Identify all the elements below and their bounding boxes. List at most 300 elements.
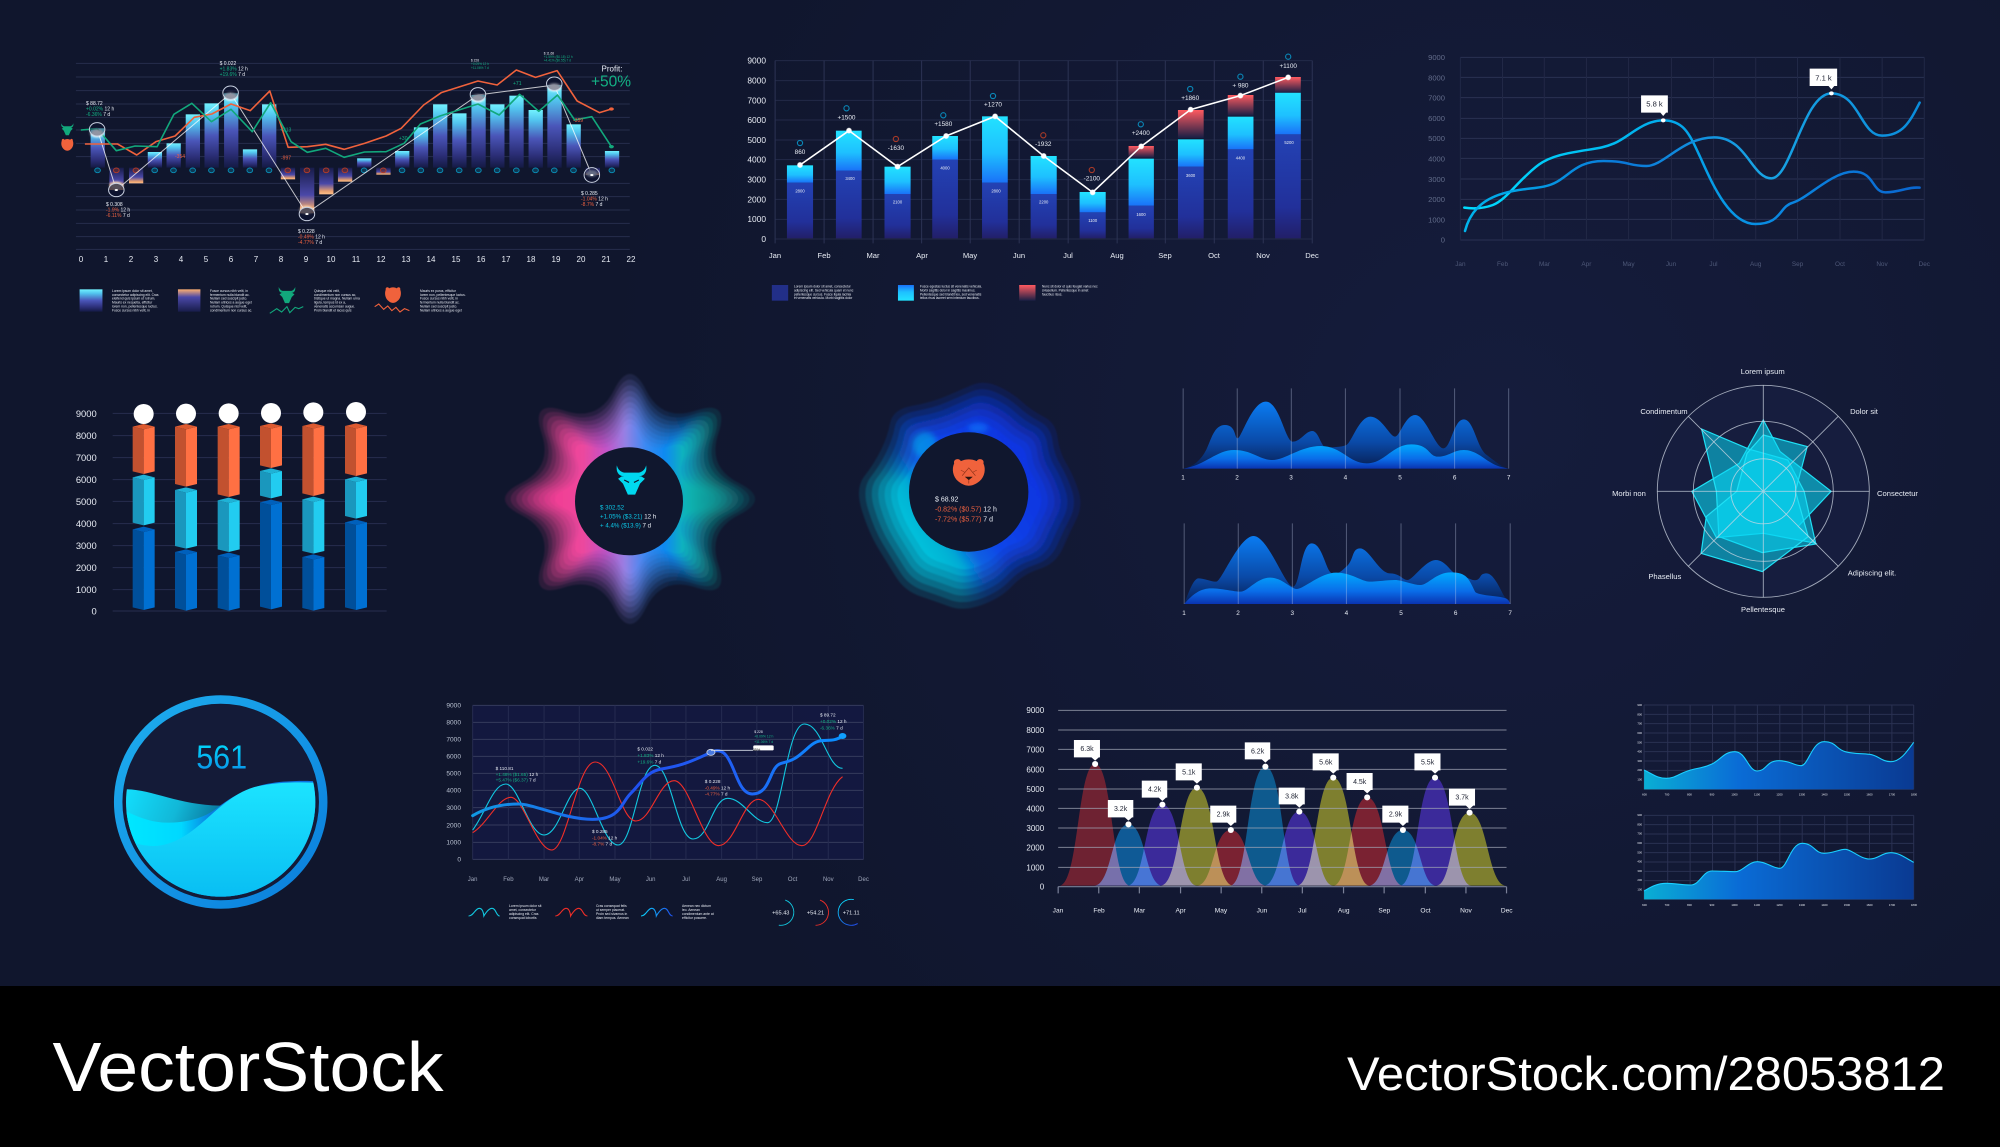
month labels: Jun [646,877,656,883]
change labels: -354 [175,154,185,160]
ratio dial 1 [764,896,797,929]
y axis labels: 3000 [747,174,766,184]
legend text 2: Pellentesque sed blandit leo, sed venenatis [920,292,982,296]
month labels: Feb [1093,908,1105,914]
legend text 3: leo. Aenean [682,908,700,912]
tooltip labels: 6.2k [1251,748,1265,755]
tooltip boxes [1074,740,1475,826]
cyan line [473,724,843,845]
ridge chart shapes [1183,388,1511,604]
chart annotations: -6.36% [820,725,835,730]
small price annotations: +0.09% 12 h [471,62,489,66]
bull price line [81,94,611,157]
price annotations: 7 d [314,240,322,246]
y axis labels: 4000 [446,788,461,795]
price annotations: $ 0.022 [220,61,237,67]
change labels: +71 [513,81,522,87]
y axis labels: 3000 [1428,175,1445,184]
top area [1644,742,1914,789]
month labels: Jul [1063,251,1073,260]
change labels: -997 [281,156,291,162]
legend text 2: Morbi sagittis dolor in sagittis maximus. [920,288,976,292]
legend text 1: Lorem ipsum dolor sit [509,904,541,908]
top front area [1183,444,1509,469]
bottom chart y labels: 200 [1637,878,1642,882]
price annotations: -6.36% [86,112,102,118]
tooltip labels: 2.9k [1217,812,1230,819]
legend text 3: Proin blandit et lacus quis [314,308,352,312]
legend text 2: Nullam sed suscipit justo. [210,297,247,301]
x axis labels: 11 [352,255,361,264]
series 1 [1692,420,1831,543]
panel: multi-line chart with annotations [446,703,869,930]
footer brand: VectorStock [52,1028,445,1106]
y axis labels: 1000 [747,214,766,224]
x axis labels: 13 [402,255,411,264]
bottom chart x labels: 1100 [1754,903,1760,907]
series 3 [1701,435,1808,572]
legend text 1: eleifend quis ipsum ut rutrum. [112,297,155,301]
bottom chart y labels: 100 [1637,888,1642,892]
y axis labels: 7000 [747,95,766,105]
profit value: +50% [591,74,631,90]
legend text 2: diam tempus. Aenean [596,916,629,920]
chart annotations: 12 h [528,772,539,777]
y axis labels: 0 [91,606,97,616]
month labels: Nov [1876,261,1888,268]
legend text 3: Aenean nec dictum [682,904,711,908]
values inside bars: 4400 [1236,156,1246,160]
bull stats text: $ 302.52 [600,504,625,512]
top chart y labels: 800 [1637,712,1642,716]
footer bar [0,986,2000,1147]
blob layers [859,383,1080,609]
x axis labels: 5 [204,255,209,264]
legend text 1: Lorem ipsum dolor sit amet, consectetur [794,284,852,288]
baseline axis and ticks [1058,887,1507,893]
rising bars [91,85,619,168]
month labels: Aug [1750,261,1762,268]
top axis labels: 4 [1344,474,1348,482]
chart annotations: +1.48% ($1.65) [496,772,528,777]
price annotations: 12 h [314,235,325,241]
legend text 2: rutrum. Quisque nisl velit, [210,304,247,308]
bear stats text: 7 d [981,517,993,524]
column 4 [260,403,282,609]
values inside bars: 2800 [991,188,1001,194]
legend text 2: Cras consequat felis [596,904,627,908]
legend text 2: ut semper placerat. [596,908,625,912]
bottom chart y labels: 900 [1637,813,1642,817]
top chart grid [1644,705,1914,789]
column 1 [133,404,155,610]
icon: bull head [617,465,646,495]
y axis labels: 2000 [1428,195,1445,204]
bottom axis labels: 6 [1454,610,1458,617]
y axis labels: 7000 [1026,746,1045,755]
bottom vertical guides [1184,523,1510,604]
top chart x labels: 1100 [1754,792,1760,796]
month labels: May [1215,908,1228,914]
chart annotations: 7 d [528,778,536,783]
month labels: Jul [682,877,690,883]
month labels: Oct [1208,251,1221,260]
radar labels: Condimentum [1640,407,1688,416]
price annotations: -1.04% [581,197,597,203]
legend text 3: venenatis accumsan augue. [314,304,355,308]
month labels: Mar [866,251,880,260]
bottom axis labels: 7 [1508,610,1512,617]
series 2 [1702,429,1816,553]
y axis labels [1428,53,1445,245]
y axis labels: 1000 [1026,863,1045,872]
chart annotations: $ 0.228 [705,779,721,784]
y axis labels: 7000 [446,737,461,744]
column 5 [302,402,324,611]
chart 1 shapes [76,63,630,313]
month labels: Jul [1709,261,1718,268]
tooltip labels: 3.8k [1285,794,1299,800]
price annotations: $ 0.308 [106,202,123,208]
change labels: -389 [573,118,583,124]
tooltip labels: 5.6k [1319,759,1333,766]
values inside bars: 2800 [795,188,805,194]
top chart y labels: 600 [1637,731,1642,735]
price annotations: 7 d [237,72,245,78]
legend text 4: Mauris ex purus, efficitur [420,289,457,293]
gauge ring [118,700,323,904]
month labels [1053,908,1513,914]
bottom chart x labels: 700 [1665,903,1670,907]
bull stats text: 7 d [641,522,652,530]
month labels: May [609,877,621,883]
legend text 3: condimentum non cursus ac, [314,293,356,297]
bear stats text: -7.72% ($5.77) [935,517,981,524]
panel: ridge area charts [1181,388,1512,617]
y axis labels: 4000 [1428,154,1445,164]
month labels: Oct [1835,261,1845,268]
chart annotations: 12 h [720,786,730,791]
top chart x labels: 1800 [1911,792,1918,796]
y axis labels: 9000 [446,703,461,710]
tooltip labels [1080,746,1469,819]
chart annotations: -8.7% [592,842,604,847]
month labels: Dec [1919,261,1931,268]
bottom chart x labels: 1600 [1866,903,1873,907]
values inside bars: 1600 [1136,212,1146,217]
legend text 2: Proin sed sivamus in [596,912,627,916]
chart annotations [496,712,847,847]
top chart x labels: 1300 [1799,792,1806,796]
bear price line [85,70,611,155]
y axis labels: 3000 [446,805,461,812]
y axis labels: 5000 [446,771,461,778]
legend text 4: Nullam ultrices a augue eget [420,308,462,312]
legend text 1: adipiscing elit. Sed vehicula quam et nunc [794,288,854,292]
x axis labels: 1 [104,255,109,264]
price annotations [86,61,608,246]
trend points [798,75,1291,195]
top chart x labels: 1600 [1866,792,1873,796]
bottom back area [1184,536,1511,604]
tooltip labels: 4.2k [1148,787,1162,794]
legend text 1: et venenatis vehicula. Morbi sagittis dolor [794,296,853,300]
month labels: Aug [1110,251,1124,260]
up/down indicator icons [797,54,1291,173]
top chart y labels: 500 [1637,740,1642,744]
chart annotations: +0.02% [820,719,836,724]
gauge disc [123,704,319,900]
legend text 2: tellus risus laoreet sem interdum faucibus. [920,296,980,300]
price annotations: 7 d [594,202,603,208]
legend text 3: sHasellum. Pellentesque in amet [1042,288,1089,292]
column 3 [218,403,240,611]
y axis labels: 5000 [747,135,766,145]
price annotations: -8.7% [581,202,595,208]
legend wave 2 [555,908,587,916]
change labels: -1932 [1035,141,1052,148]
bull line end dot [609,145,614,148]
change labels: 860 [795,149,806,156]
y axis labels [747,56,766,244]
top back area [1183,402,1509,469]
y axis labels: 5000 [1026,785,1045,794]
y axis labels: 1000 [446,840,461,847]
bull stats text: +1.05% ($3.21) [600,514,642,520]
month labels: Feb [817,251,831,260]
month labels: Mar [1539,261,1551,268]
legend swatch: dark [772,285,788,301]
tooltip labels: 3.2k [1114,806,1128,813]
top chart x labels: 1500 [1844,792,1851,796]
price annotations: 12 h [237,66,248,72]
top area outline [1644,742,1914,778]
y axis labels: 4000 [747,155,766,165]
chart 3 shapes [1460,57,1924,240]
month labels: Sep [752,877,763,883]
tooltip labels: 6.3k [1080,746,1094,753]
panel: small area charts [1637,703,1918,907]
top chart y labels: 400 [1637,750,1642,754]
price annotations: 12 h [597,197,608,203]
values inside bars: 4000 [940,166,950,170]
top chart y labels: 200 [1637,768,1642,772]
chart annotations: 12 h [836,719,847,724]
y axis labels [446,703,461,864]
chart annotations: $ 228 [754,730,763,734]
second peak point [1829,91,1834,95]
top axis labels: 1 [1181,474,1185,482]
chart annotations: 7 d [604,842,612,847]
month labels: Aug [716,877,727,883]
ratio dial 1: +65.43 [772,910,789,916]
x axis labels: 16 [477,255,486,264]
panel: two-series smooth line chart [1428,53,1931,268]
month labels [1455,261,1931,268]
top axis labels: 2 [1235,474,1239,482]
bells and gridlines [1058,710,1507,893]
gauge value: 561 [196,738,247,775]
radar labels: Morbi non [1612,489,1646,498]
top chart y labels [1637,703,1642,782]
y axis labels: 8000 [1026,726,1045,735]
bottom chart x labels: 800 [1687,903,1692,907]
legend icon: bear [385,287,401,303]
month labels: Sep [1378,908,1390,914]
y axis labels: 1000 [1428,215,1445,224]
values inside bars: 2100 [893,200,903,204]
change labels: +1860 [1181,95,1200,102]
radar labels: Pellentesque [1741,605,1785,614]
bottom axis labels: 2 [1236,610,1240,617]
red line [473,762,843,850]
month labels: Jan [468,877,477,883]
month labels: Jan [1455,261,1466,268]
blob layers [505,374,755,624]
small price annotations: $ 228 [471,58,479,62]
tooltip labels: 4.5k [1353,779,1367,786]
y axis labels: 2000 [446,822,461,829]
top chart x labels: 1400 [1821,792,1828,796]
y axis labels [1026,706,1045,892]
price annotations: -6.11% [106,213,122,219]
legend text 1: pellentesque cursus. Fusce ligula lacinia [794,292,851,296]
bottom axis labels [1182,610,1512,617]
y axis labels: 2000 [76,562,97,573]
bottom chart x labels [1642,903,1918,907]
month labels: Oct [1420,908,1431,914]
y axis labels: 9000 [1428,53,1445,62]
dark bar segments [787,134,1301,238]
direction badges [95,168,615,173]
bottom chart y labels: 500 [1637,850,1642,854]
small price annotations: $ 11.68 [544,52,554,56]
bottom chart x labels: 1300 [1799,903,1806,907]
legend swatch: falling [178,289,200,312]
bottom chart x labels: 900 [1710,903,1715,907]
chart annotations: $ 0.022 [637,746,653,752]
values inside bars: 2200 [1039,200,1049,204]
red bar segments [1129,77,1301,158]
bottom axis labels: 1 [1182,610,1186,617]
y axis labels: 8000 [446,720,461,727]
chart annotations: +19.6% [637,760,653,764]
legend squiggle: bull [270,307,303,313]
month labels: Jun [1666,261,1677,268]
price annotations: +0.02% [86,107,104,113]
month labels: Dec [1501,908,1513,914]
bottom chart x labels: 1400 [1821,903,1828,907]
price annotations: 7 d [121,213,130,219]
x axis labels: 6 [229,255,234,264]
legend text 2: Fusce cursus nibh velit, in [210,289,248,293]
month labels: Mar [539,877,549,883]
radar labels: Consectetur [1877,489,1918,498]
values inside bars: 5200 [1284,140,1294,145]
column 6 [345,402,367,610]
price annotations: +19.6% [220,72,237,78]
month labels: Dec [858,877,869,883]
upper series [1465,93,1920,231]
price annotations: +1.83% [220,66,237,72]
legend text 4: Nullam sed suscipit justo. [420,304,457,308]
x axis labels: 0 [79,255,84,264]
x axis labels: 8 [279,255,284,264]
icon: bull [61,123,73,135]
panel: overlapping bell curves chart [1026,706,1513,914]
bottom axis labels: 5 [1399,610,1403,617]
chart annotations: 12 h [653,753,664,758]
month labels: Jul [1298,908,1307,914]
bottom chart x labels: 1200 [1776,903,1783,907]
x axis labels: 19 [552,255,561,264]
ratio dial 2: +54.21 [807,910,824,916]
legend text 3: ligula, tempus id ex a, [314,301,346,305]
y axis labels: 9000 [76,408,97,419]
thick blue line [473,736,843,819]
y axis labels: 8000 [1428,73,1445,82]
top chart x labels: 700 [1665,792,1670,796]
legend text 1: Lorem ipsum dolor sit amet, [112,289,153,293]
legend text 2: condimentum non cursus ac. [210,308,252,312]
chart annotations: +0.09% 12 h [754,735,774,739]
bottom axis labels: 3 [1291,610,1295,617]
legend wave 3 [641,908,673,916]
chart annotations: $ 89.72 [820,712,836,718]
white trend line [97,85,592,213]
top chart x labels: 1200 [1776,792,1783,796]
legend text 1: lorem non, pellentesque luctus. [112,304,158,308]
chart annotations: -4.77% [705,792,720,797]
bottom chart x labels: 1800 [1911,903,1918,907]
x axis labels: 15 [452,255,461,264]
tooltip labels: 5.8 k [1646,100,1663,109]
trend line [800,77,1288,192]
top chart x labels [1642,792,1918,796]
bull stats text: 12 h [642,514,657,520]
top chart y labels: 700 [1637,722,1642,726]
top axis labels: 5 [1398,474,1402,482]
x axis labels: 17 [502,255,511,264]
legend swatch: red [1019,285,1036,301]
cyan inner patch, upper left [913,432,937,458]
y axis labels: 6000 [1428,114,1445,123]
change labels: +2400 [1132,130,1150,137]
chart 2 shapes [772,61,1312,301]
bottom front area [1184,572,1511,604]
tooltip labels [1646,74,1832,109]
month labels: Jun [1013,251,1025,260]
legend swatch: cyan [898,285,914,301]
legend wave 1 [469,908,500,916]
panel: bear radial blob [859,383,1080,609]
bottom chart y labels: 800 [1637,822,1642,826]
y axis labels: 0 [457,857,461,864]
y axis labels: 8000 [76,430,97,441]
month labels: Apr [1175,908,1187,914]
price annotations: $ 88.72 [86,101,103,107]
ratio dial 3 [833,895,869,930]
y axis labels: 0 [1040,883,1045,892]
center disc [575,447,683,555]
lower series [1464,120,1920,224]
chart annotations: -0.49% [705,786,720,791]
panel: bull radial blob [505,374,755,624]
bottom chart y labels: 400 [1637,860,1642,864]
legend text 1: adipiscing elit. Cras [509,912,539,916]
price annotations: $ 0.285 [581,191,598,197]
bottom chart x labels: 600 [1642,903,1647,907]
